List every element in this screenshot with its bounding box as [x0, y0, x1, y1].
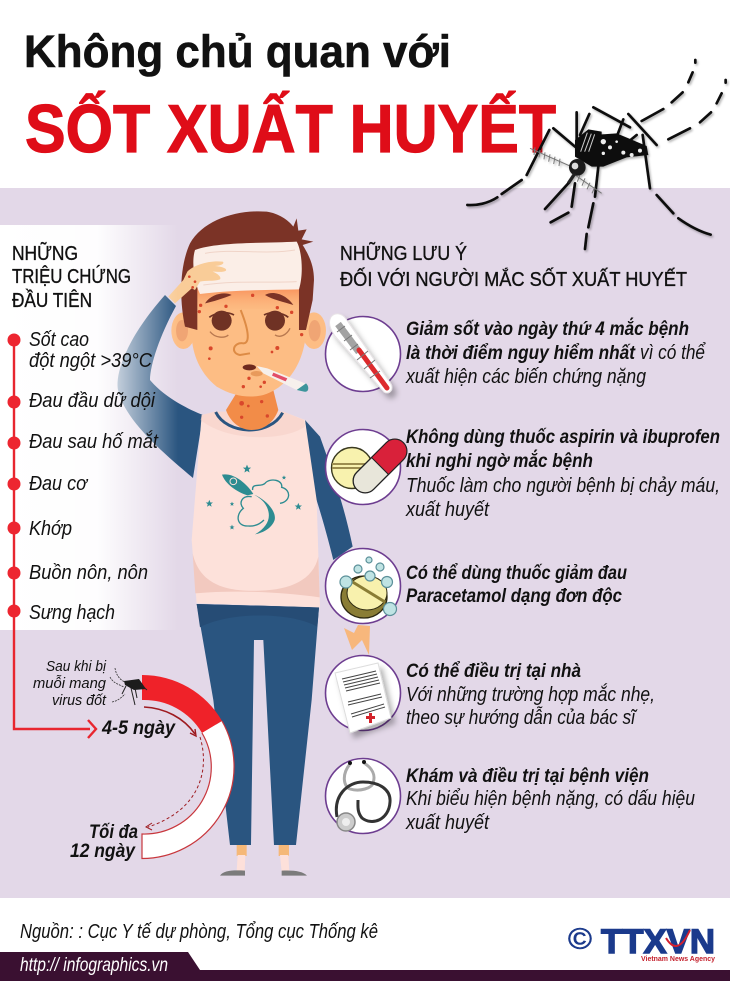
note 5: hospital: xuất huyết: [405, 812, 490, 834]
logo: TTXVN: ©: [568, 923, 592, 956]
note 2: pills: [326, 426, 720, 521]
title: SỐT XUẤT HUYẾT: [25, 90, 556, 167]
small mosquito with caption: Sau khi bị: [46, 659, 107, 675]
head: [168, 211, 326, 430]
icon: tablet with bubbles: [326, 548, 400, 624]
symptom timeline: Đau sau hố mắt: [29, 430, 159, 453]
note 1: thermometer: Giảm sốt vào ngày thứ 4 mắc bệnh: [406, 317, 689, 340]
title: Không chủ quan với: [24, 26, 451, 77]
symptom timeline: Đau đầu dữ dội: [29, 390, 156, 412]
trousers: [197, 604, 319, 876]
logo: TTXVN: TTXVN: [601, 923, 715, 961]
note 4: home treatment: [326, 656, 655, 733]
small mosquito with caption: [33, 659, 147, 709]
note 4: home treatment: theo sự hướng dẫn của bác sĩ: [406, 706, 638, 729]
heading: first symptoms: TRIỆU CHỨNG: [12, 265, 131, 288]
note 2: pills: xuất huyết: [405, 499, 490, 521]
source text: Nguồn: : Cục Y tế dự phòng, Tổng cục Thống kê: [20, 921, 378, 943]
incubation arc chart: 4-5 ngày: [101, 717, 176, 739]
symptom timeline: Sưng hạch: [29, 602, 115, 624]
note 4: home treatment: Có thể điều trị tại nhà: [406, 660, 581, 682]
logo: TTXVN: Vietnam News Agency: [641, 954, 716, 963]
heading: first symptoms: ĐẦU TIÊN: [12, 289, 92, 312]
note 1: thermometer: xuất hiện các biến chứng nặng: [405, 366, 646, 388]
left panel fade: [0, 225, 178, 630]
note 5: hospital: Khi biểu hiện bệnh nặng, có dấu hiệu: [406, 788, 695, 810]
symptom timeline: Khớp: [29, 518, 72, 540]
note 3: effervescent tablet: Paracetamol dạng đơn độc: [406, 585, 622, 607]
small mosquito with caption: muỗi mang: [33, 675, 106, 692]
note 5: hospital: Khám và điều trị tại bệnh viện: [406, 765, 649, 787]
hand on forehead: [168, 261, 226, 303]
person illustration: [118, 211, 370, 876]
right hand: [344, 625, 370, 655]
raised arm sleeve: [118, 295, 203, 478]
icon: thermometer: [326, 314, 400, 393]
heading: notes: NHỮNG LƯU Ý: [340, 241, 467, 265]
icon: prescription document: [326, 656, 400, 733]
small mosquito with caption: virus đốt: [52, 693, 107, 709]
heading: first symptoms: NHỮNG: [12, 241, 78, 265]
note 3: effervescent tablet: Có thể dùng thuốc giảm đau: [406, 562, 627, 584]
footer bar: http:// infographics.vn: [20, 955, 168, 976]
note 5: hospital: [326, 758, 695, 834]
symptom timeline: [8, 329, 159, 738]
symptom timeline: đột ngột >39°C: [29, 350, 153, 372]
incubation arc chart: Tối đa: [89, 821, 138, 843]
symptom timeline: Sốt cao: [29, 329, 89, 351]
rocket print: [206, 465, 302, 534]
symptom timeline: Buồn nôn, nôn: [29, 562, 148, 584]
footer bar: [0, 952, 730, 981]
icon: pills: [326, 430, 412, 504]
symptom timeline: Đau cơ: [29, 473, 89, 495]
background panel: [0, 188, 730, 898]
note 4: home treatment: Với những trường hợp mắc nhẹ,: [406, 683, 655, 706]
heading: first symptoms: [12, 241, 131, 312]
heading: notes: [340, 241, 687, 291]
incubation arc chart: 12 ngày: [70, 840, 136, 862]
sweater: [192, 412, 353, 607]
note 1: thermometer: vì có thể: [640, 342, 706, 364]
incubation arc chart: [70, 675, 234, 862]
title: [24, 26, 556, 167]
icon: stethoscope: [326, 758, 400, 834]
note 1: thermometer: [326, 314, 706, 393]
icon: large mosquito: [467, 60, 726, 249]
thermometer in mouth: [257, 366, 308, 392]
note 1: thermometer: là thời điểm nguy hiểm nhất: [406, 342, 636, 364]
note 3: effervescent tablet: [326, 548, 627, 624]
note 2: pills: khi nghi ngờ mắc bệnh: [406, 449, 593, 472]
heading: notes: ĐỐI VỚI NGƯỜI MẮC SỐT XUẤT HUYẾT: [340, 267, 687, 291]
